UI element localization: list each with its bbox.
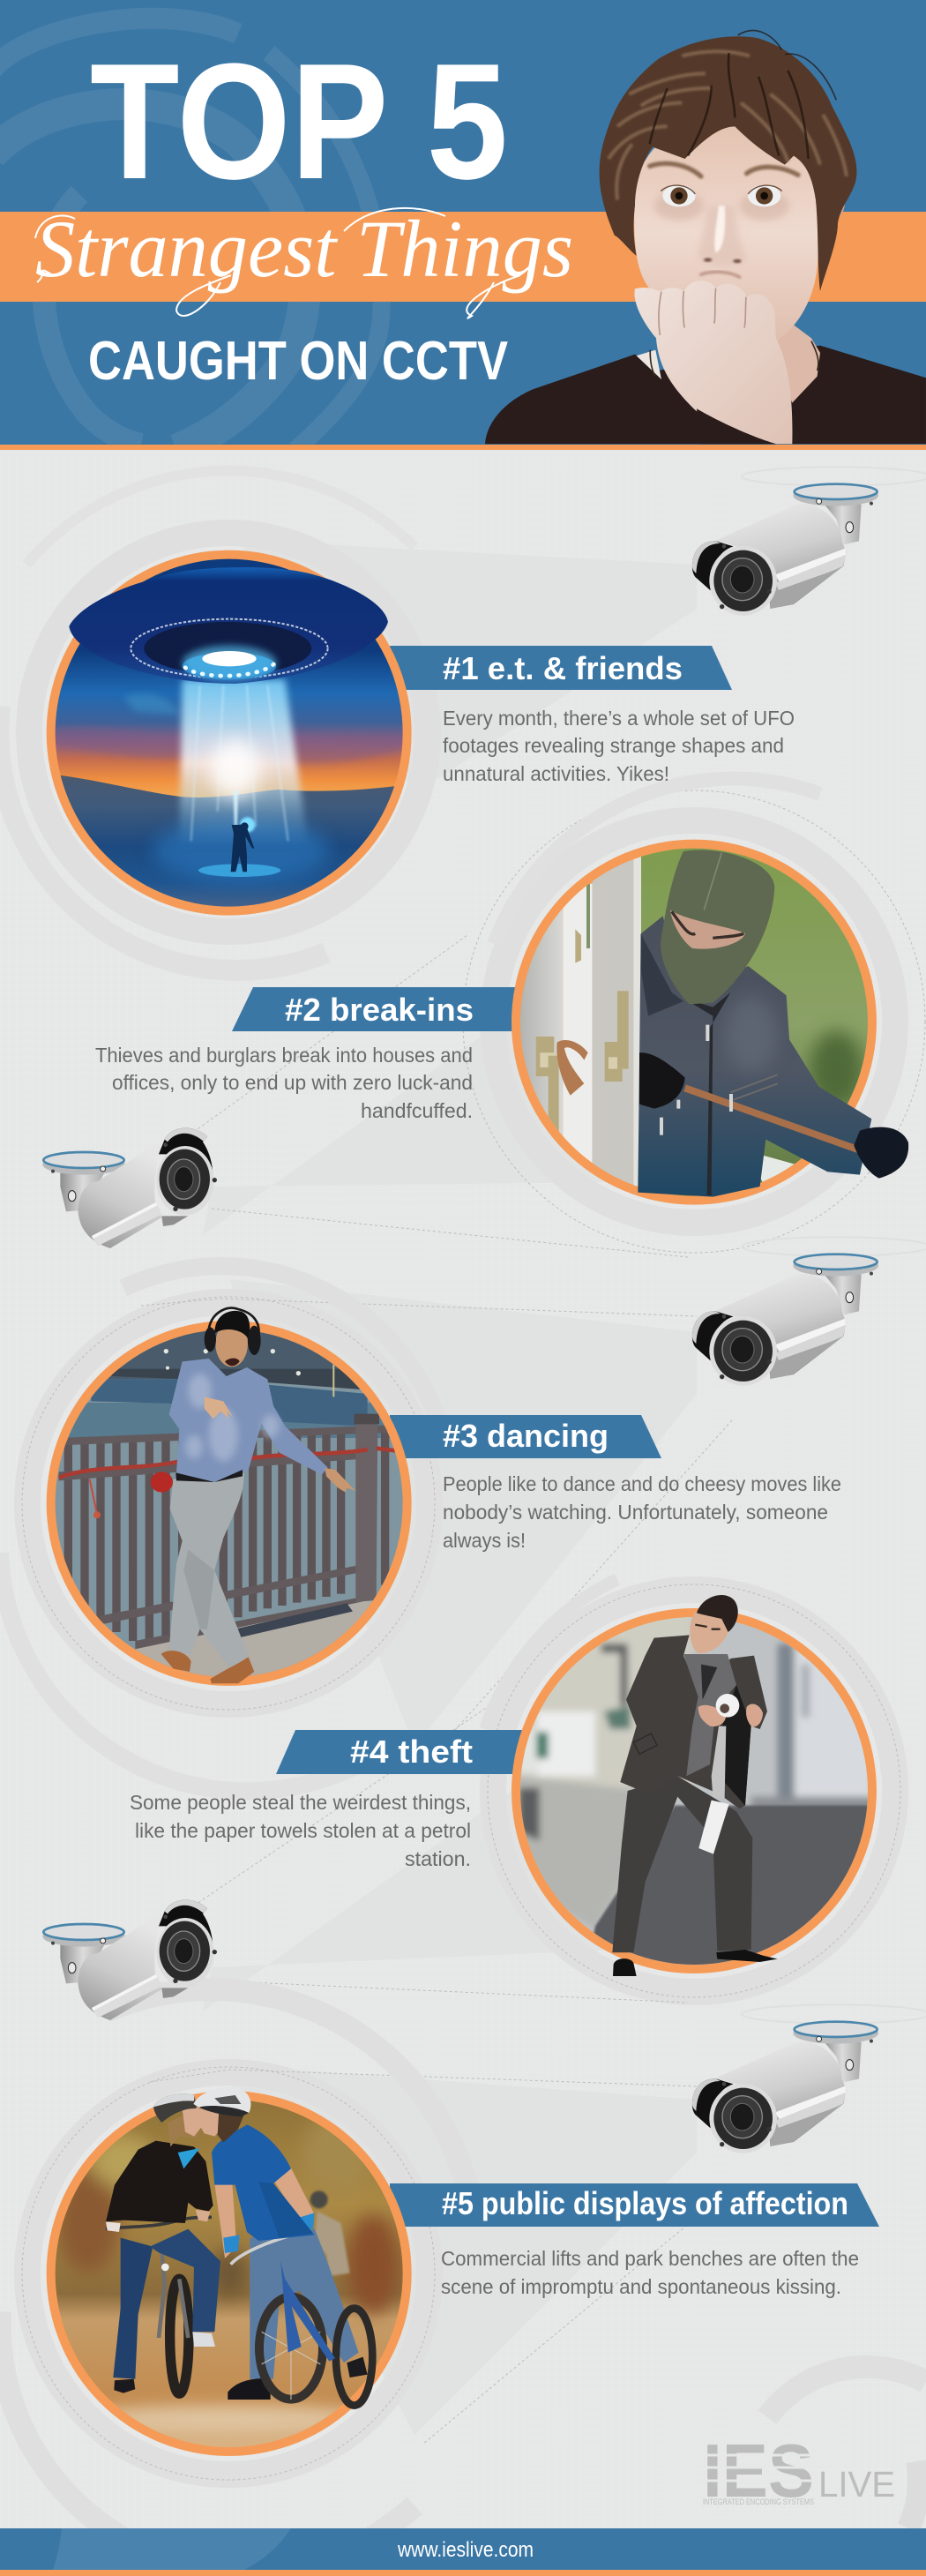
eyes	[662, 185, 696, 206]
heading 4: #4 theft	[350, 1734, 473, 1770]
title: top 5: TOP 5	[90, 29, 508, 213]
hands	[205, 1397, 233, 1419]
footer	[0, 2528, 926, 2576]
logo: ies live	[697, 2430, 895, 2513]
background: camera beams and rings behind panel 1	[0, 471, 697, 970]
heading 3: #3 dancing	[443, 1418, 609, 1454]
ribbon 1	[390, 646, 732, 690]
bike 1	[106, 2217, 212, 2393]
crowbar	[556, 1040, 863, 1151]
panel 5: public displays of affection	[47, 2087, 879, 2456]
panel 3: dancing	[47, 1308, 841, 1688]
body text 2	[95, 1044, 473, 1122]
shirt	[683, 1654, 736, 1776]
website url: www.ieslive.com	[397, 2538, 534, 2562]
belt	[175, 1470, 243, 1482]
face	[634, 125, 819, 341]
dancer figure	[161, 1308, 355, 1683]
heading 1: #1 e.t. & friends	[443, 650, 683, 686]
body text 4	[130, 1791, 471, 1870]
zipper pulls	[661, 1025, 731, 1135]
shoes	[613, 1958, 637, 1976]
photo 2: burglar	[512, 840, 908, 1205]
heading 5: #5 public displays of affection	[442, 2185, 848, 2221]
orange title band	[0, 212, 926, 302]
thief figure	[612, 1595, 778, 1976]
body text 3: always is!	[443, 1529, 526, 1552]
burglar figure	[638, 916, 871, 1197]
camera 5	[692, 2004, 926, 2153]
body text 2: offices, only to end up with zero luck-and	[112, 1071, 473, 1094]
ribbon 2	[232, 987, 520, 1031]
background: camera beams and rings behind panel 4	[194, 1579, 900, 2011]
body text 4: like the paper towels stolen at a petrol	[135, 1819, 471, 1842]
body text 1: Every month, there’s a whole set of UFO	[443, 707, 795, 730]
flying saucer	[69, 567, 388, 684]
shoes	[161, 1651, 191, 1672]
woman	[106, 2093, 220, 2393]
body text 3: People like to dance and do cheesy moves like	[443, 1472, 841, 1495]
panel 4: theft	[130, 1595, 877, 1976]
logo: ies live: INTEGRATED ENCODING SYSTEMS	[703, 2497, 814, 2506]
body text 4: station.	[405, 1847, 471, 1870]
nose	[698, 206, 747, 265]
body text 4: Some people steal the weirdest things,	[130, 1791, 471, 1814]
sweater	[485, 346, 926, 444]
background: camera beams and rings behind panel 2	[185, 779, 925, 1257]
photo 5: cyclists	[47, 2087, 412, 2456]
jacket	[620, 1635, 767, 1808]
camera 2	[42, 1128, 217, 1248]
railing bars	[68, 1429, 385, 1647]
man and bike 2	[193, 2087, 372, 2406]
trousers	[169, 1473, 249, 1669]
shirt	[169, 1359, 328, 1482]
body text 1	[443, 707, 795, 785]
background cyclist	[310, 2190, 350, 2276]
camera 4	[42, 1900, 217, 2020]
ribbon 3	[390, 1415, 661, 1458]
head	[690, 1612, 729, 1653]
logo: ies live: LIVE	[818, 2464, 895, 2505]
panel 1: e.t. and friends	[47, 550, 795, 917]
door handles	[536, 991, 629, 1132]
body text 2: handfcuffed.	[361, 1099, 473, 1122]
body text 1: footages revealing strange shapes and	[443, 734, 784, 757]
mask	[661, 850, 774, 1004]
toilet roll	[712, 1726, 726, 1798]
heading 2: #2 break-ins	[285, 992, 474, 1028]
body text 5: Commercial lifts and park benches are often the	[441, 2247, 859, 2270]
gloves	[639, 1052, 685, 1109]
logo: ies live: IES	[703, 2430, 814, 2513]
background: camera beams and rings behind panel 3	[0, 1266, 732, 1791]
body text 3: nobody’s watching. Unfortunately, someone	[443, 1501, 828, 1524]
orange header rule	[0, 445, 926, 450]
title: strangest things: Strangest Things	[35, 204, 573, 294]
body text 5	[441, 2247, 859, 2298]
body text 5: scene of impromptu and spontaneous kissing.	[441, 2275, 841, 2298]
ribbon 4	[276, 1730, 529, 1774]
panel 2: break-ins	[95, 840, 908, 1205]
body text 3	[443, 1472, 841, 1552]
header banner	[0, 0, 926, 450]
photo 1: ufo	[47, 550, 412, 917]
body text 1: unnatural activities. Yikes!	[443, 762, 669, 785]
hand	[634, 281, 792, 444]
background: camera beams and rings behind panel 5	[0, 1989, 926, 2572]
camera 1	[692, 467, 926, 616]
title: caught on cctv: CAUGHT ON CCTV	[88, 331, 508, 392]
head and headphones	[215, 1321, 248, 1367]
photo 3: dancer	[47, 1308, 412, 1688]
body text 2: Thieves and burglars break into houses and	[95, 1044, 473, 1067]
camera 3	[692, 1237, 926, 1386]
header decorative rings	[0, 19, 382, 450]
jacket lining	[719, 1685, 751, 1806]
hair	[600, 36, 856, 291]
legs	[612, 1776, 752, 1952]
photo: shocked man	[485, 31, 926, 444]
photo 4: thief	[512, 1595, 877, 1976]
ribbon 5	[390, 2183, 879, 2227]
